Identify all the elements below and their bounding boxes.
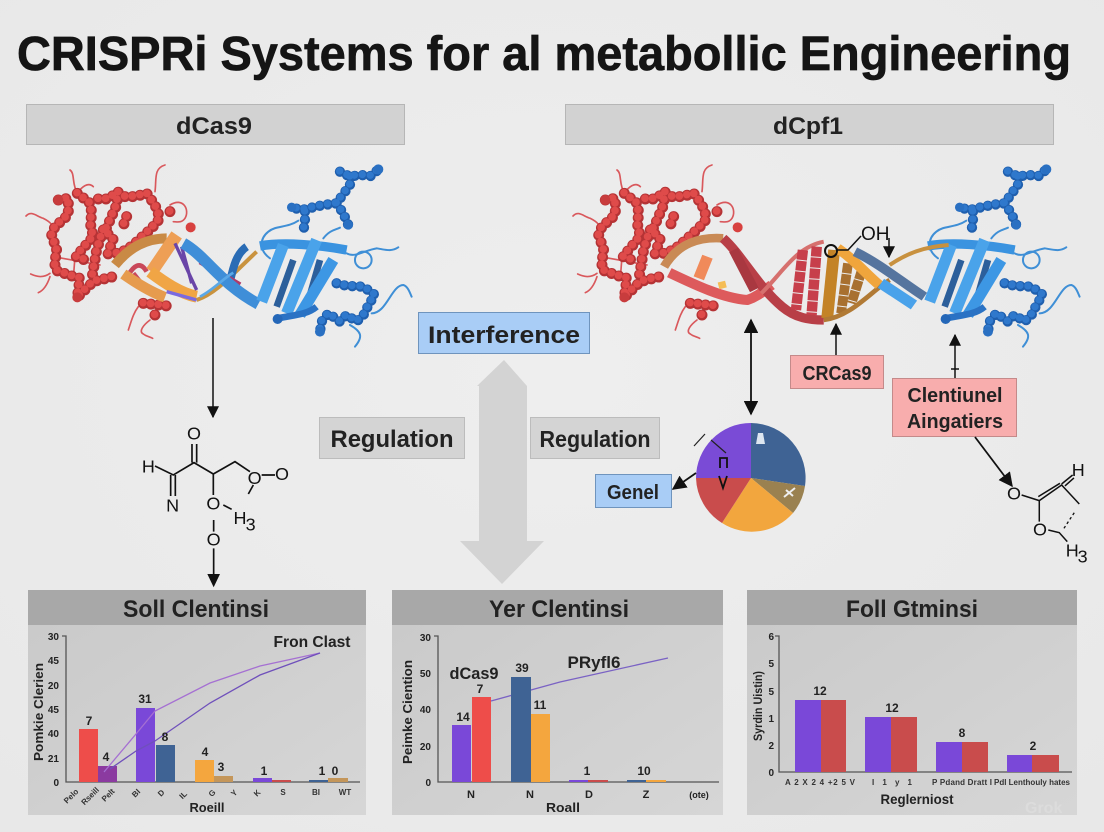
x tick labels: IL (178, 789, 189, 801)
protein: dCpf1 structure with DNA helix (573, 164, 1080, 347)
x tick labels: D (585, 789, 593, 801)
y ticks: 5 (768, 687, 774, 698)
heading: dCpf1: dCpf1 (773, 113, 843, 140)
y ticks (768, 632, 774, 779)
molecule: right (1007, 460, 1088, 567)
arrow: double arrow to pie (750, 320, 752, 414)
panel heading: Soll Clentinsi (123, 596, 269, 623)
label: Genel (596, 474, 672, 508)
molecule: left: O (207, 530, 221, 550)
arrow: Clentiunel double (951, 335, 959, 378)
arrow: CRCas9 upward (835, 324, 837, 355)
panel: Yer Clentinsi (392, 590, 723, 815)
y ticks: 45 (48, 656, 59, 667)
label: Regulation left (320, 418, 464, 458)
bar values (86, 692, 339, 778)
label: Regulation right: Regulation (540, 426, 650, 452)
x tick labels: N (526, 789, 534, 801)
panel: Soll Clentinsi (28, 590, 366, 815)
bars (795, 700, 1059, 772)
bars (452, 677, 666, 782)
y ticks: 40 (48, 729, 59, 740)
molecule: left: N (166, 496, 179, 516)
molecule: left: H (233, 508, 246, 528)
label: OH group with arrow (825, 224, 890, 257)
x tick labels (62, 786, 351, 807)
bar values (813, 684, 1037, 753)
y axis label: Peimke Ciention (400, 660, 415, 764)
bar values: 2 (1030, 739, 1037, 753)
title: CRISPRi Systems for al metabollic Engineering (17, 28, 1071, 81)
bar values: 39 (515, 661, 529, 675)
bar values: 3 (218, 760, 225, 774)
bar values: 12 (885, 701, 899, 715)
molecule: right: O (1033, 519, 1047, 539)
label: Regulation left: Regulation (330, 426, 454, 453)
y axis label: Pomkie Clerien (31, 663, 46, 761)
bar values: 14 (456, 710, 470, 724)
y ticks: 0 (425, 778, 431, 789)
panel: Foll Gtminsi (747, 590, 1077, 815)
molecule: left: 3 (246, 515, 256, 535)
label: Genel: Genel (607, 482, 659, 504)
y ticks: 30 (48, 632, 59, 643)
x tick labels (467, 789, 709, 801)
y ticks: 5 (768, 659, 774, 670)
label: Clentiunel Aingatiers (892, 378, 1016, 436)
heading: dCpf1 (566, 104, 1054, 144)
x tick labels: Rseill (80, 786, 101, 807)
bar values: 1 (261, 764, 268, 778)
label: CRCas9: CRCas9 (802, 363, 872, 385)
x tick labels: BI (312, 788, 320, 797)
trend line (491, 658, 668, 701)
x tick labels: Pelo (62, 787, 80, 805)
x tick labels: I 1 y 1 (872, 778, 913, 787)
molecule: right: H (1072, 460, 1085, 480)
x tick labels: Z (643, 789, 650, 801)
bars (79, 708, 348, 782)
heading: dCas9: dCas9 (176, 113, 252, 140)
x tick labels: WT (339, 788, 351, 797)
trend lines (104, 653, 320, 772)
y ticks: 21 (48, 754, 59, 765)
arrow: pie to Genel (673, 473, 696, 489)
molecule: left: O (248, 468, 262, 488)
x tick labels: P Pdand Dratt I (932, 778, 992, 787)
x tick labels: (ote) (689, 790, 709, 800)
x tick labels: Pelt (100, 787, 117, 804)
y ticks: 30 (420, 633, 431, 644)
panel heading: Foll Gtminsi (846, 596, 978, 623)
x tick labels: G (207, 788, 218, 799)
bar values: 11 (534, 698, 547, 712)
y axis label: Syrdin Uistin) (751, 671, 765, 741)
y ticks: 0 (53, 778, 59, 789)
x tick labels: Y (229, 788, 240, 798)
y ticks: 20 (420, 742, 431, 753)
heading: dCas9 (26, 104, 404, 144)
label: OH group with arrow: OH (861, 224, 890, 245)
annotation: dCas9: dCas9 (450, 664, 498, 683)
x tick labels: K (252, 788, 263, 798)
molecule: right: 3 (1078, 547, 1088, 567)
label: CRCas9 (790, 356, 884, 388)
molecule: left: H (142, 457, 155, 477)
x tick labels: N (467, 789, 475, 801)
y ticks: 40 (420, 705, 431, 716)
bar values: 12 (813, 684, 827, 698)
axes (62, 636, 360, 782)
bar values: 31 (138, 692, 152, 706)
protein: dCas9 structure (26, 164, 412, 347)
bar values: 7 (477, 682, 484, 696)
annotation: Fron Clast (274, 634, 351, 651)
molecule: left: O (275, 464, 289, 484)
x tick labels: BI (130, 787, 142, 799)
panel heading: Yer Clentinsi (489, 596, 629, 623)
x axis label: Reglerniost (880, 791, 954, 807)
panel header (392, 590, 723, 625)
molecule: right: O (1007, 483, 1021, 503)
y ticks: 20 (48, 681, 59, 692)
panel header (747, 590, 1077, 625)
arrow: central grey double arrow (460, 360, 544, 584)
y ticks (48, 632, 59, 789)
bar values: 4 (103, 750, 110, 764)
bar values (456, 661, 651, 778)
arrow: dCas9 to molecule (212, 318, 214, 417)
axes (775, 636, 1072, 772)
y ticks: 6 (768, 632, 774, 643)
x axis label: Roeill (190, 800, 224, 815)
y ticks (420, 633, 431, 789)
bar values: 8 (162, 730, 169, 744)
bar values: 7 (86, 714, 93, 728)
bar values: 1 (319, 764, 326, 778)
bar values: 10 (637, 764, 651, 778)
label: Clentiunel Aingatiers: Clentiunel (908, 385, 1002, 407)
molecule: left (142, 423, 289, 587)
watermark: Grok (1025, 800, 1062, 817)
arrow: Clentiunel to molecule (975, 437, 1012, 486)
label: Clentiunel Aingatiers: Aingatiers (907, 411, 1003, 433)
annotation: PRyfl6: PRyfl6 (568, 653, 620, 672)
y ticks: 45 (48, 705, 59, 716)
x tick labels: D (156, 788, 167, 798)
bar values: 1 (584, 764, 591, 778)
y ticks: 2 (768, 741, 774, 752)
center label: Interference: Interference (428, 322, 580, 349)
molecule: left: O (206, 493, 220, 513)
x tick labels: S (280, 788, 286, 797)
pie chart (694, 423, 806, 532)
y ticks: 1 (768, 714, 774, 725)
bar values: 8 (959, 726, 966, 740)
x axis label: Roall (546, 800, 580, 815)
label: Regulation right (530, 418, 660, 458)
x tick labels: Pdl Lenthouly hates (994, 778, 1071, 787)
y ticks: 0 (768, 768, 774, 779)
y ticks: 50 (420, 669, 431, 680)
x tick labels: A 2 X 2 4 +2 5 V (785, 778, 856, 787)
bar values: 4 (202, 745, 209, 759)
bar values: 0 (332, 764, 339, 778)
molecule: right: H (1066, 541, 1079, 561)
x tick labels (785, 778, 1071, 787)
axes (434, 636, 719, 782)
center label: Interference (418, 312, 590, 354)
molecule: left: O (187, 423, 201, 443)
panel header (28, 590, 366, 625)
